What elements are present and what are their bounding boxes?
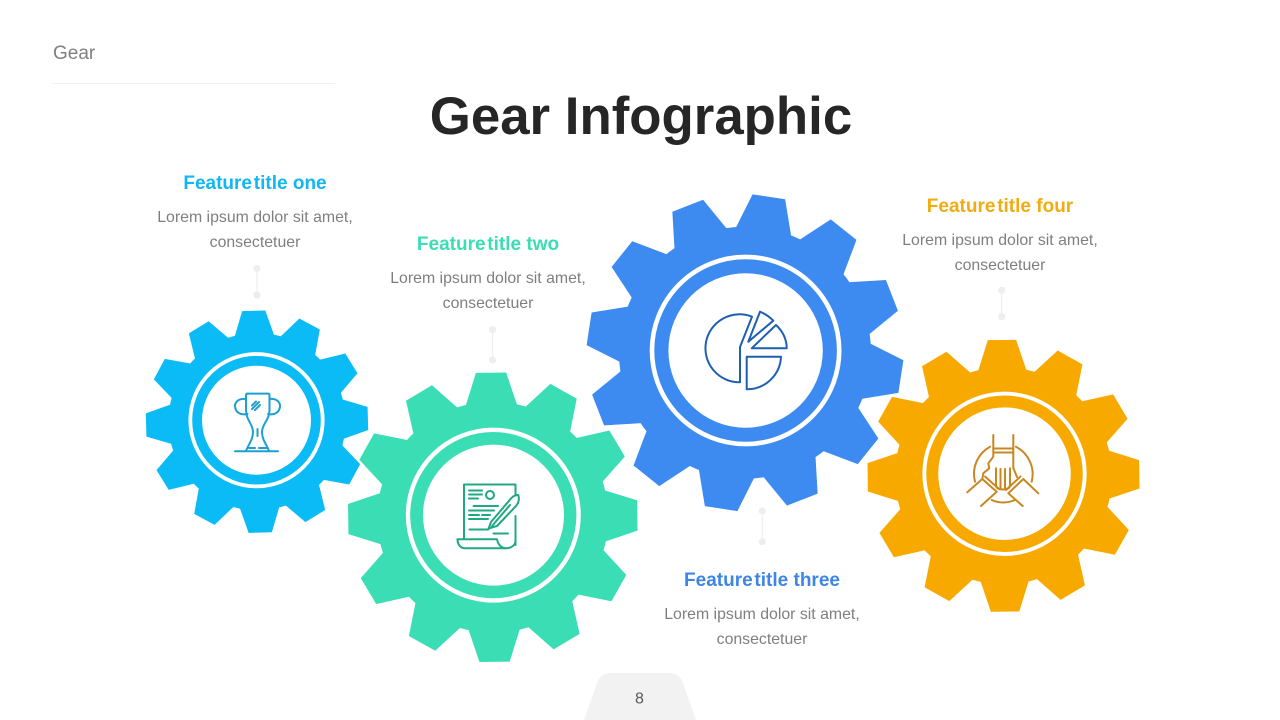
text block: feature four description: consectetuer — [955, 257, 1046, 274]
gear four: orange with hands — [866, 338, 1141, 613]
heading: feature title one: Feature title one — [183, 173, 327, 194]
heading: feature title four: Feature title four — [927, 196, 1074, 217]
icon: document and quill — [458, 484, 519, 548]
connector: feature two — [489, 326, 496, 364]
connector: feature four — [998, 287, 1005, 320]
connector: feature one — [253, 265, 261, 299]
text block: feature three description: Lorem ipsum dolor sit amet, — [664, 606, 860, 623]
page number: 8 — [635, 690, 644, 708]
icon: joined hands — [967, 435, 1038, 506]
panel: feature two text — [390, 234, 586, 312]
text block: feature one description: Lorem ipsum dolor sit amet, — [157, 209, 353, 226]
gear three: blue with pie chart — [565, 173, 925, 532]
text block: feature two description: consectetuer — [443, 295, 534, 312]
panel: feature four text — [902, 196, 1098, 274]
heading: feature title three: Feature title three — [684, 570, 840, 591]
icon: pie chart — [705, 312, 787, 389]
gear two: teal with document — [346, 371, 639, 664]
gear one: cyan with trophy — [143, 308, 371, 536]
text block: feature three description: consectetuer — [717, 631, 808, 648]
title: Gear Infographic — [430, 87, 852, 146]
section label: Gear: Gear — [53, 43, 96, 64]
connector: feature three — [759, 507, 766, 545]
page number tab — [584, 673, 696, 720]
text block: feature two description: Lorem ipsum dolor sit amet, — [390, 270, 586, 287]
panel: feature one text — [157, 173, 353, 251]
text block: feature four description: Lorem ipsum dolor sit amet, — [902, 232, 1098, 249]
text block: feature one description: consectetuer — [210, 234, 301, 251]
icon: trophy — [235, 394, 280, 451]
panel: feature three text — [664, 570, 860, 648]
heading: feature title two: Feature title two — [417, 234, 559, 255]
